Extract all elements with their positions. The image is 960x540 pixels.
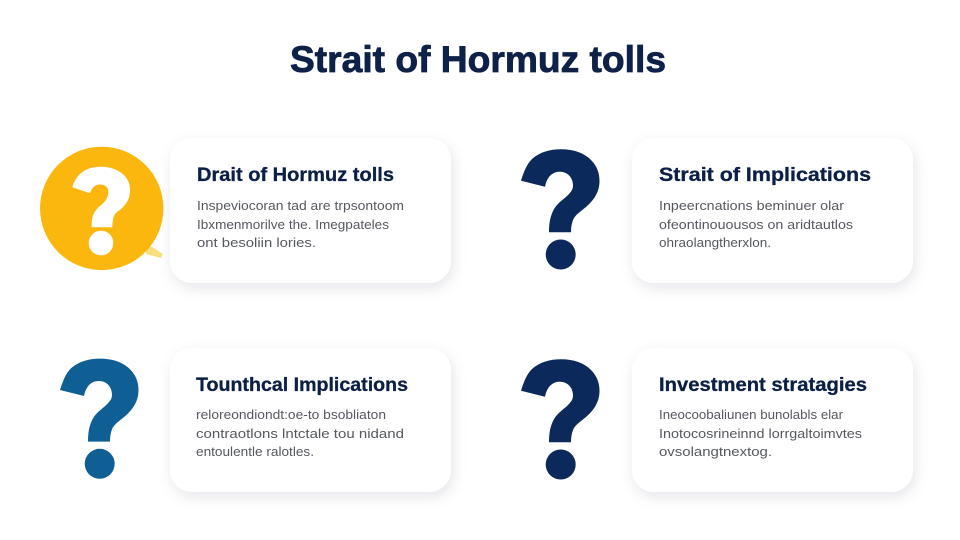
- card background: [632, 348, 913, 492]
- card heading: Tounthcal Implications: [196, 375, 408, 396]
- card background: [632, 138, 913, 283]
- card body text: [659, 198, 854, 250]
- card body text: ovsolangtnextog.: [659, 444, 772, 459]
- card body text: Ineocoobaliunen bunolabls elar: [659, 407, 844, 422]
- card heading: Investment stratagies: [659, 375, 867, 396]
- card body text: ofeontinouousos on aridtautlos: [659, 217, 854, 232]
- card heading: Drait of Hormuz tolls: [197, 165, 394, 186]
- card body text: ohraolangtherxlon.: [659, 235, 771, 250]
- card body text: [659, 407, 863, 459]
- card body text: Inspeviocoran tad are trpsontoom: [197, 198, 404, 213]
- card body text: Ibxmenmorilve the. Imegpateles: [197, 217, 390, 232]
- card body text: Inotocosrineinnd lorrgaltoimvtes: [659, 426, 863, 441]
- card body text: [197, 198, 404, 250]
- title: Strait of Hormuz tolls: [290, 39, 666, 80]
- card body text: Inpeercnations beminuer olar: [659, 198, 845, 213]
- icon: navy question mark: [521, 149, 600, 270]
- card body text: entoulentle ralotles.: [196, 444, 314, 459]
- card background: [170, 348, 451, 492]
- icon: yellow question mark badge: [40, 147, 163, 270]
- card background: [170, 138, 451, 283]
- icon: navy question mark: [521, 359, 600, 480]
- icon: blue question mark: [60, 359, 138, 479]
- card body text: reloreondiondt:oe-to bsobliaton: [196, 407, 386, 422]
- card body text: ont besoliin lories.: [197, 235, 316, 250]
- card body text: contraotlons lntctale tou nidand: [196, 426, 404, 441]
- panel: bottom-right card: [521, 348, 913, 492]
- panel: bottom-left card: [60, 348, 451, 492]
- panel: top-left card: [40, 138, 451, 283]
- card heading: Strait of Implications: [659, 165, 871, 186]
- panel: top-right card: [521, 138, 913, 283]
- card body text: [196, 407, 404, 459]
